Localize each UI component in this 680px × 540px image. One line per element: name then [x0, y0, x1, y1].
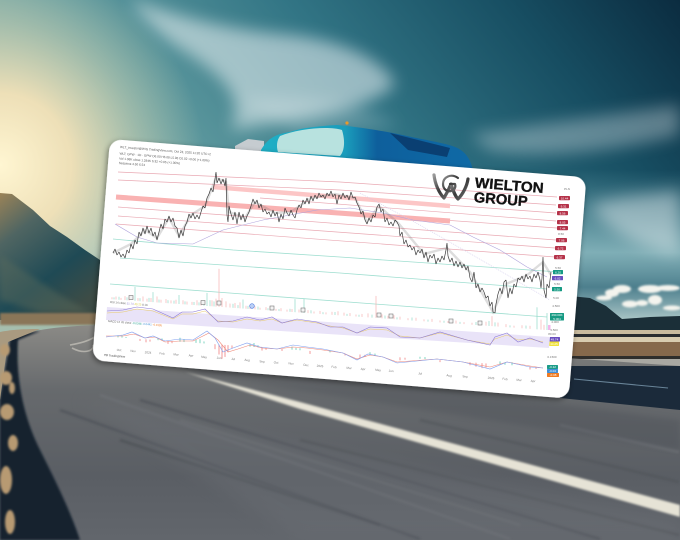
time axis labels: Jun: [389, 369, 394, 373]
time axis labels: Oct: [117, 348, 122, 352]
red resistance tags: 10.44: [561, 196, 569, 200]
time axis labels: Dec: [303, 363, 309, 367]
chart header text: [119, 145, 211, 172]
time axis labels: May: [375, 368, 382, 372]
RSI panel: RSI 14 close 51.74 49.25 8 16: [110, 300, 148, 307]
price line halo: [113, 178, 551, 312]
time axis labels: 2024: [145, 350, 152, 355]
time axis labels: May: [201, 355, 208, 359]
time axis labels: Apr: [531, 379, 536, 383]
background: left mountain: [0, 193, 100, 325]
windshield: [277, 128, 344, 156]
time axis labels: Sep: [259, 359, 265, 364]
time axis labels: Mar: [173, 352, 179, 357]
grey axis ticks: 4.500: [552, 304, 560, 308]
red resistance tags: 6.72: [558, 246, 564, 250]
background: clouds: [130, 0, 680, 255]
time axis labels: Feb: [502, 377, 508, 381]
background: road shadow and guard rail: [0, 329, 80, 540]
time axis labels: Aug: [244, 358, 250, 362]
event markers: [129, 296, 482, 325]
background: far road barriers on the right: [560, 330, 680, 367]
time axis labels: [117, 348, 536, 383]
grey axis ticks: 5.00: [553, 296, 559, 300]
time axis labels: Mar: [346, 366, 352, 370]
moving averages: [115, 193, 550, 300]
grey axis ticks: 5.50: [555, 266, 561, 270]
background: distant clouds on the right: [596, 285, 680, 310]
Wielton Group logo: [434, 175, 544, 210]
logo wordmark: GROUP: [473, 190, 529, 210]
chart header text: Vol 1.08K close 1.284K 6.32 +0.05 (+1.00%): [119, 156, 180, 165]
red resistance tags: 9.31: [561, 204, 567, 208]
grey axis ticks: 80.00: [548, 332, 556, 336]
MACD panel: MACD 12 26 close -0.0246 -0.0441 -0.0195: [108, 319, 163, 327]
chart header text: Sessions 4.50 6.54: [119, 161, 145, 167]
cab body: [260, 125, 473, 170]
teal and purple tags: 490.00K: [551, 313, 563, 317]
time axis labels: Aug: [446, 373, 452, 378]
logo wordmark: WIELTON: [474, 176, 544, 197]
grey axis ticks: 8.50: [558, 232, 564, 236]
chart contents: [104, 145, 570, 383]
red resistance tags: 8.56: [560, 211, 566, 215]
time axis labels: Nov: [130, 349, 136, 353]
teal and purple tags: 49.74: [551, 337, 559, 341]
time axis labels: Oct: [274, 360, 279, 365]
chart header text: WLT, GPW · 1D · GPW O6.00 H6.08 L5.96 C6.02 +0.06 (+1.00%): [119, 151, 210, 163]
teal and purple tags: 6.20: [555, 270, 561, 274]
red resistance tags: 7.44: [560, 226, 566, 230]
white chart card: [92, 139, 586, 399]
time axis labels: Feb: [159, 351, 165, 356]
time axis labels: Jun: [217, 356, 222, 360]
highlighted price bands: [116, 187, 450, 221]
teal and purple tags: -0.04: [549, 369, 556, 373]
teal and purple tags: [547, 270, 564, 377]
background: sky: [0, 0, 680, 345]
teal and purple tags: 44.25: [550, 342, 558, 346]
RSI panel: [106, 300, 550, 348]
red resistance tags: 8.05: [560, 220, 566, 224]
right axis price labels: [547, 187, 570, 377]
teal and purple tags: 5.004: [553, 317, 561, 321]
grey axis ticks: PLN: [564, 187, 570, 191]
teal and purple tags: -0.08: [550, 373, 557, 377]
MACD panel: [106, 319, 543, 381]
road centre line: [185, 372, 680, 517]
time axis labels: Sep: [462, 374, 468, 379]
grey axis ticks: 0.1500: [547, 355, 557, 359]
time axis labels: Apr: [189, 353, 194, 358]
volume bars: [112, 261, 547, 330]
grey axis ticks: 4.000: [551, 320, 559, 324]
chart header text: WLT_investor@WIG TradingView.com, Oct 23, 2025 11:20 UTC+2: [120, 145, 211, 156]
time axis labels: Feb: [331, 365, 337, 369]
grey axis ticks: 5.50: [554, 282, 560, 286]
grey axis ticks: [547, 187, 570, 359]
background: road surface: [0, 325, 680, 540]
resistance lines: [116, 172, 557, 257]
teal and purple tags: -0.12: [549, 365, 556, 369]
logo wordmark: [473, 176, 544, 210]
time axis labels: Jul: [418, 371, 422, 376]
time axis labels: Apr: [361, 367, 366, 371]
support lines: [110, 239, 559, 317]
teal and purple tags: 6.02: [555, 276, 561, 280]
time axis labels: Nov: [288, 361, 294, 366]
logo mark: [434, 175, 468, 199]
time axis labels: Mar: [516, 378, 522, 382]
grey axis ticks: 3.500: [550, 328, 558, 332]
TradingView credit: TV TradingView: [104, 353, 126, 359]
time axis labels: Jul: [231, 357, 235, 361]
teal and purple tags: 5.50: [554, 287, 560, 291]
price line: [113, 172, 551, 313]
side vents: [390, 133, 450, 157]
trailer: [235, 139, 264, 155]
red resistance tags: 7.06: [559, 238, 565, 242]
red resistance tags: [554, 196, 570, 259]
time axis labels: 2025: [317, 364, 324, 368]
beacon: [345, 121, 349, 125]
background: right mountains: [570, 296, 680, 332]
truck: [235, 121, 473, 170]
MACD histogram: [118, 333, 536, 381]
time axis labels: 2026: [488, 376, 495, 380]
red resistance tags: 6.37: [557, 255, 563, 259]
